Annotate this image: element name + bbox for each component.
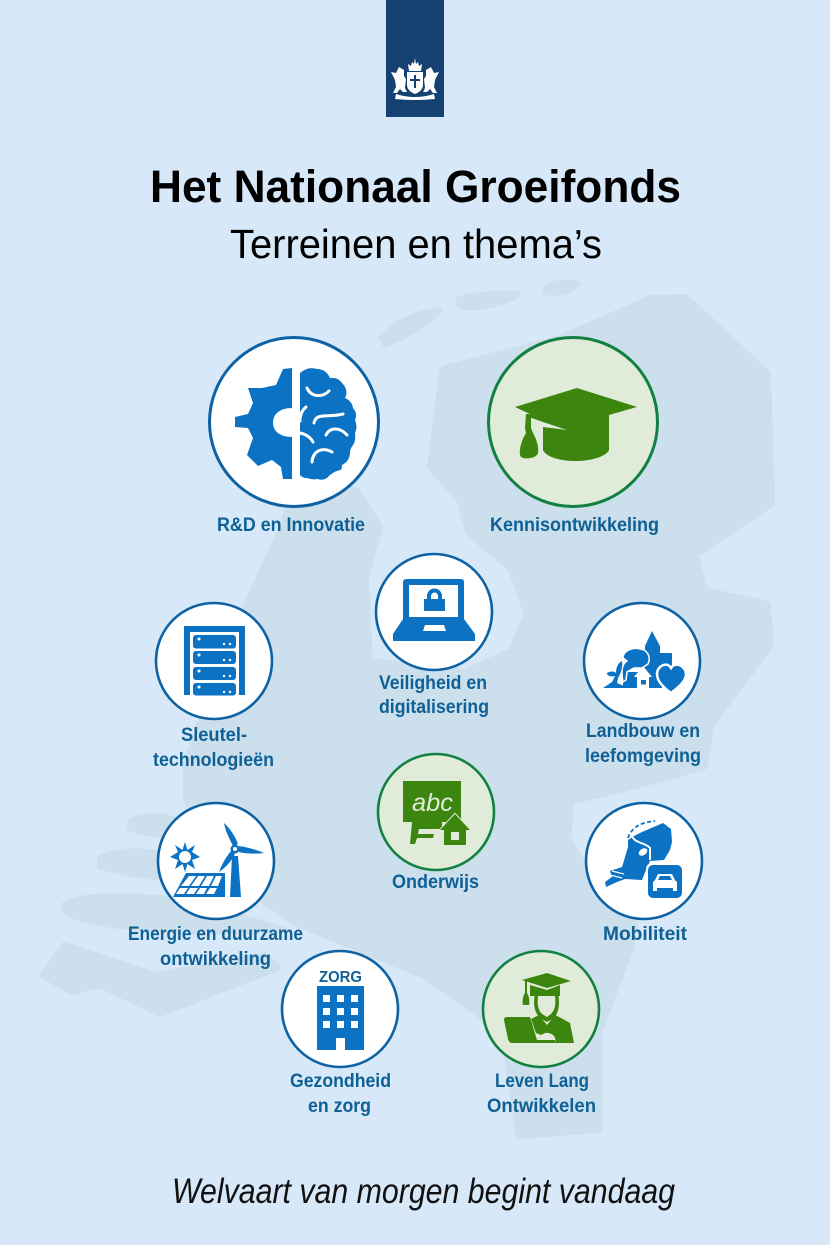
item: Onderwijs [378, 754, 494, 893]
icon: graduate with laptop [504, 973, 574, 1043]
item: Energie en duurzame ontwikkeling: ontwikkeling [160, 949, 271, 970]
label: Mobiliteit [603, 924, 688, 945]
item: Veiligheid en digitalisering: digitalisering [379, 697, 489, 718]
label: Gezondheid [290, 1071, 391, 1092]
item: Landbouw en leefomgeving: leefomgeving [585, 746, 701, 767]
item: Kennisontwikkeling [488, 338, 659, 536]
icon: laptop with lock [393, 579, 475, 641]
item: Leven Lang Ontwikkelen [483, 951, 599, 1117]
background map of the Netherlands [42, 282, 768, 1132]
icon: graduation cap [515, 388, 637, 461]
label: Energie en duurzame [128, 924, 303, 945]
label: Sleutel- [181, 725, 247, 746]
logo banner [386, 0, 444, 117]
icon: village and heart [603, 631, 686, 693]
item: Gezondheid en zorg [282, 951, 398, 1117]
crest [391, 58, 439, 100]
title: Het Nationaal Groeifonds [150, 161, 681, 212]
item: Veiligheid en digitalisering [376, 554, 492, 718]
subtitle: Terreinen en thema’s [230, 221, 602, 267]
item: Energie en duurzame ontwikkeling [128, 803, 303, 970]
icon: care building: ZORG [319, 969, 362, 986]
label: Landbouw en [586, 721, 700, 742]
icon: care building [317, 969, 364, 1050]
item: Landbouw en leefomgeving [584, 603, 701, 767]
label: Veiligheid en [379, 673, 487, 694]
icon: server rack [184, 626, 245, 696]
label: Onderwijs [392, 872, 479, 893]
item: Leven Lang Ontwikkelen: Ontwikkelen [487, 1096, 596, 1117]
item: R&D en Innovatie [210, 338, 378, 536]
label: R&D en Innovatie [217, 515, 365, 536]
label: Leven Lang [495, 1071, 589, 1092]
label: Kennisontwikkeling [490, 515, 659, 536]
icon: gear and brain [235, 368, 356, 480]
icon: blackboard and house: abc [412, 789, 454, 817]
item: Gezondheid en zorg: en zorg [308, 1096, 371, 1117]
slogan: Welvaart van morgen begint vandaag [172, 1172, 675, 1211]
icon: map of the Netherlands and car [605, 821, 683, 900]
icon: sun, wind turbine and solar panel [170, 823, 264, 897]
item: Mobiliteit [586, 803, 702, 945]
item: Sleuteltechnologieën [153, 603, 274, 771]
item: Sleuteltechnologieën: technologieën [153, 750, 274, 771]
